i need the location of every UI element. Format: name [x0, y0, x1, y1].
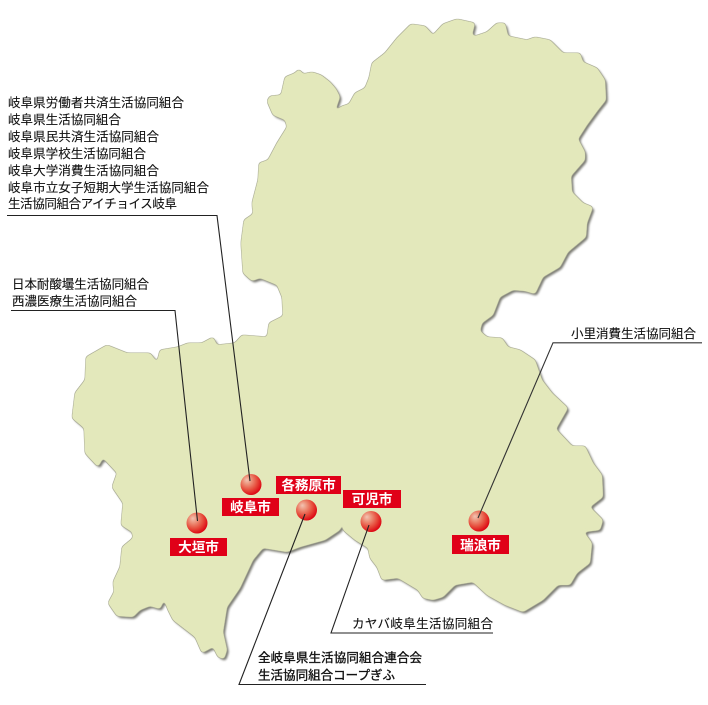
label: 岐阜市: 岐阜市: [230, 499, 271, 515]
leader line: 大垣市: [11, 310, 198, 521]
pin: 大垣市: [186, 512, 208, 534]
text block: 岐阜市の組合: 岐阜県民共済生活協同組合: [8, 129, 159, 144]
text block: 岐阜市の組合: [8, 95, 209, 211]
text block: 各務原市の組合: [258, 650, 422, 682]
label: 可児市: [343, 490, 401, 508]
label: 岐阜市: [222, 498, 279, 516]
text: 小里消費生活協同組合: 小里消費生活協同組合: [571, 326, 696, 341]
label: 瑞浪市: 瑞浪市: [460, 537, 501, 553]
label: 大垣市: 大垣市: [178, 539, 219, 555]
text block: 岐阜市の組合: 岐阜県学校生活協同組合: [8, 146, 146, 161]
pin: 可児市: [360, 511, 382, 532]
text block: 大垣市の組合: 日本耐酸壜生活協同組合: [12, 276, 149, 292]
map: Gifu prefecture: [72, 19, 606, 659]
text block: 岐阜市の組合: 岐阜市立女子短期大学生活協同組合: [8, 180, 209, 195]
text block: 岐阜市の組合: 岐阜県生活協同組合: [8, 112, 121, 127]
pin: 瑞浪市: [468, 510, 490, 532]
label: 可児市: 可児市: [352, 491, 393, 507]
text: カヤバ岐阜生活協同組合: カヤバ岐阜生活協同組合: [352, 616, 493, 631]
label: 大垣市: [170, 538, 227, 556]
leader line: 瑞浪市: [478, 343, 702, 518]
leader line: 各務原市: [239, 514, 426, 684]
text block: 各務原市の組合: 全岐阜県生活協同組合連合会: [258, 650, 422, 665]
pin: 各務原市: [296, 500, 317, 520]
text block: 岐阜市の組合: 岐阜県労働者共済生活協同組合: [8, 95, 184, 110]
text block: 岐阜市の組合: 生活協同組合アイチョイス岐阜: [8, 196, 177, 211]
leader line: 可児市: [331, 525, 493, 633]
pin: 岐阜市: [240, 474, 262, 495]
label: 各務原市: [276, 476, 341, 494]
label: 各務原市: 各務原市: [281, 477, 336, 493]
leader line: 岐阜市: [7, 216, 250, 481]
label: 瑞浪市: [452, 535, 509, 554]
text block: 大垣市の組合: 西濃医療生活協同組合: [12, 294, 137, 308]
text block: 各務原市の組合: 生活協同組合コープぎふ: [258, 668, 395, 682]
text block: 大垣市の組合: [12, 276, 149, 308]
text block: 岐阜市の組合: 岐阜大学消費生活協同組合: [8, 163, 159, 178]
